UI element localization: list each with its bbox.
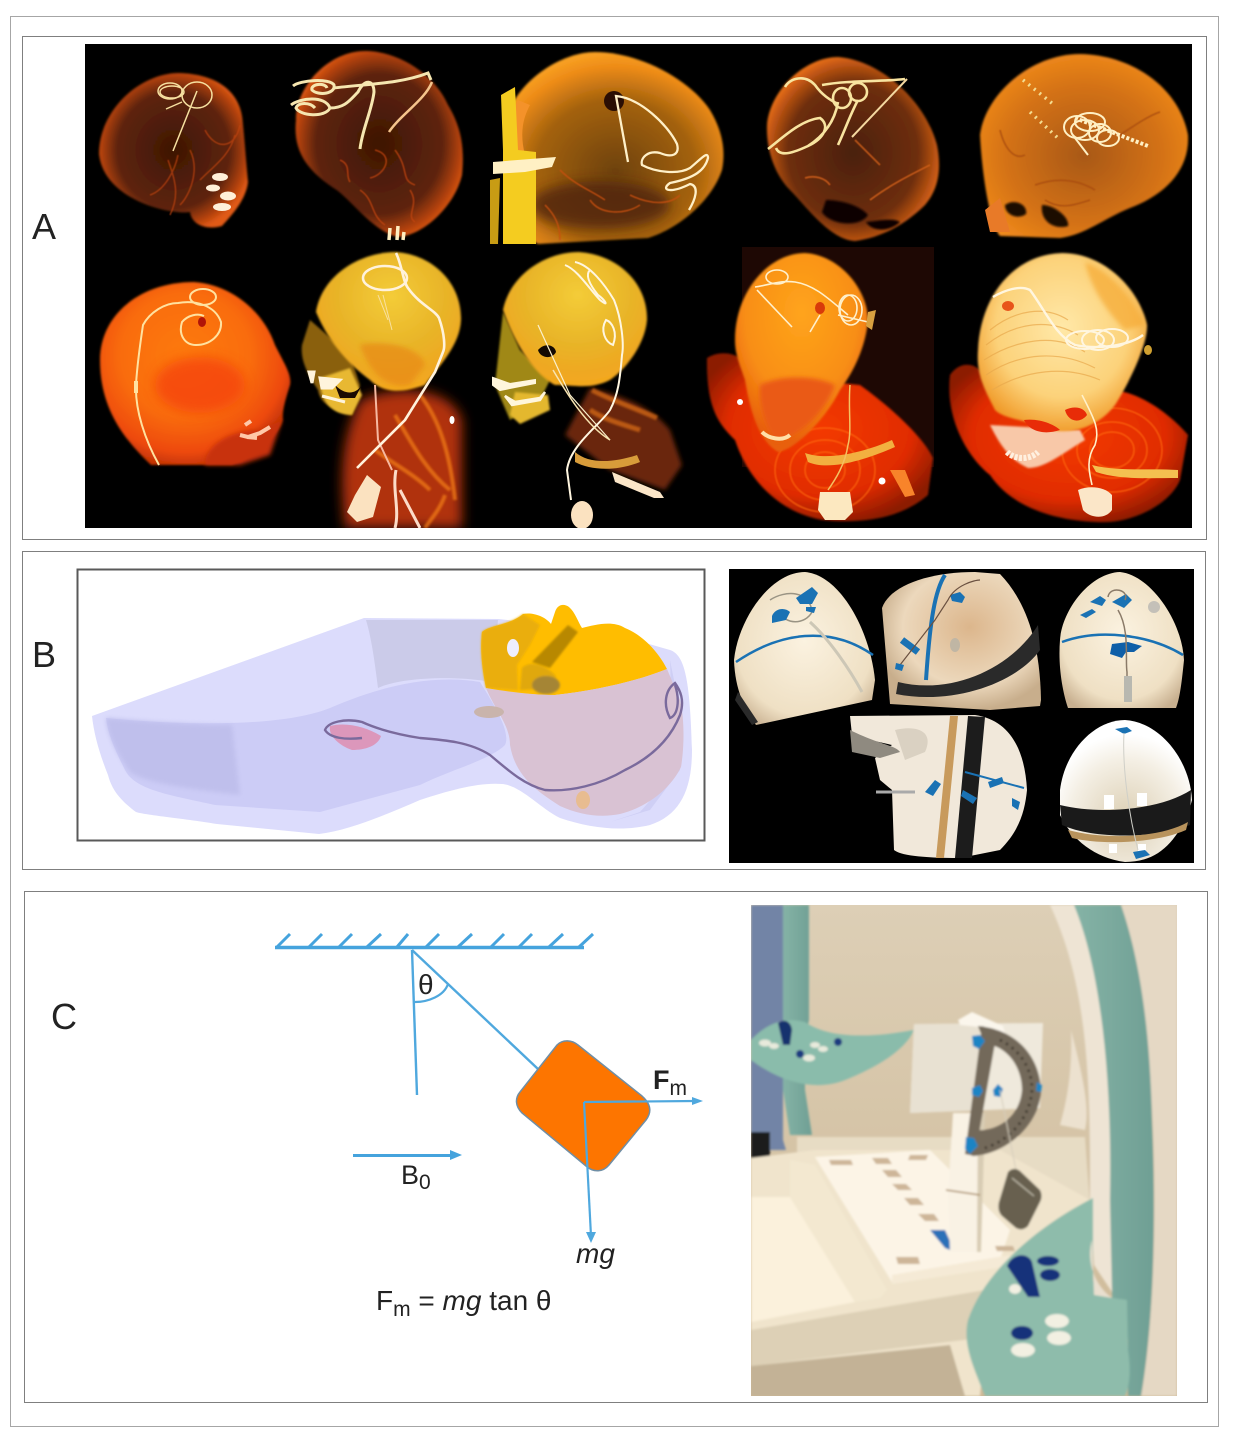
skull 6 bottom row	[100, 282, 290, 465]
skull 9 bottom row with shoulders and generator	[707, 247, 934, 521]
slotted board	[815, 1150, 1010, 1282]
phantom photos on black	[729, 569, 1194, 863]
skull 1 top row	[99, 73, 248, 227]
panel B: phantom model and physical phantom photos	[22, 552, 1206, 870]
panel C: force diagram and test photo	[24, 892, 1208, 1402]
panel label A: A	[32, 206, 56, 247]
Fm label: F	[653, 1065, 670, 1095]
generator pink	[330, 724, 381, 750]
right control buttons	[1007, 1255, 1071, 1357]
equation: m	[393, 1298, 411, 1321]
angle arc	[415, 984, 448, 1002]
inner wall	[366, 620, 498, 688]
right wall inner recess	[1060, 1030, 1087, 1130]
ceiling hatch	[275, 934, 593, 948]
photo: head right	[1059, 572, 1184, 708]
tray basin floor	[106, 680, 506, 812]
force vectors	[584, 1101, 695, 1236]
lower table edge	[751, 1290, 985, 1366]
B0 arrow	[353, 1150, 462, 1160]
string	[412, 950, 538, 1069]
scanner table	[751, 1150, 1090, 1396]
skull 8 bottom row with neck and generator	[493, 252, 682, 529]
protractor	[972, 1026, 1041, 1156]
nose stub	[474, 706, 504, 718]
eye hole	[507, 639, 519, 657]
top clips	[958, 1011, 1004, 1033]
CT images	[99, 51, 1188, 529]
skull 10 bottom row with shoulders and generator	[949, 253, 1188, 522]
head pink bottom	[486, 669, 684, 816]
left control panel	[751, 1020, 914, 1085]
basin shade	[106, 718, 240, 795]
B0 label: B	[401, 1160, 419, 1190]
arrowhead mg	[586, 1232, 596, 1243]
test photo in scanner	[751, 905, 1177, 1396]
equation: mg tan θ	[443, 1285, 552, 1316]
orange block	[516, 1041, 650, 1171]
protractor holes	[985, 1040, 1032, 1148]
blue side wall	[751, 905, 786, 1150]
blue putty pieces	[965, 1035, 1042, 1154]
panel label B: B	[32, 634, 56, 675]
B0 label: 0	[419, 1171, 431, 1194]
white backing plate	[979, 1022, 1044, 1112]
table rails	[790, 1160, 887, 1302]
photo: head left	[734, 572, 875, 725]
Fm label: m	[670, 1077, 687, 1100]
skull 3 top row with yellow support	[490, 52, 724, 244]
hanging string	[1000, 1090, 1016, 1170]
skull 2 top row	[291, 51, 463, 240]
white stand	[948, 1113, 981, 1252]
photo: head side profile	[850, 715, 1027, 858]
mg label: mg	[576, 1238, 615, 1269]
skull 5 top row	[980, 54, 1188, 238]
yellow face shading	[481, 614, 578, 694]
panel label C: C	[51, 996, 77, 1037]
right control dark slot	[1090, 1240, 1112, 1298]
right outer cream wall	[1121, 905, 1177, 1396]
right tray inner lining	[610, 660, 682, 822]
theta label: θ	[418, 969, 434, 1000]
rear platform	[797, 1137, 1090, 1205]
phantom tray	[92, 618, 692, 834]
pendulum force diagram	[275, 934, 703, 1321]
head yellow top	[481, 605, 667, 695]
photo: head back view	[1060, 720, 1192, 862]
simulation model box	[78, 570, 704, 840]
photo: head center	[882, 572, 1041, 710]
skull 7 bottom row with neck and generator	[302, 252, 462, 528]
white inner arch	[1050, 905, 1114, 1295]
arrowhead Fm	[692, 1097, 703, 1105]
left control buttons	[759, 1021, 842, 1062]
blue tape on table	[930, 1230, 955, 1252]
lead wire	[325, 683, 682, 790]
right control panel	[966, 1198, 1130, 1396]
orange spot	[576, 791, 590, 809]
skull 4 top row	[767, 57, 939, 241]
teal arch band	[1074, 905, 1154, 1396]
left green column	[783, 905, 812, 1135]
black image background	[85, 44, 1192, 528]
table inner tray	[751, 1197, 855, 1322]
panel A: CT renderings of skulls with implanted leads	[22, 36, 1206, 540]
vertical reference line	[412, 950, 417, 1095]
equation: F	[376, 1285, 393, 1316]
hanging generator	[998, 1169, 1042, 1229]
board slots	[829, 1155, 1015, 1264]
equation: =	[411, 1285, 443, 1316]
